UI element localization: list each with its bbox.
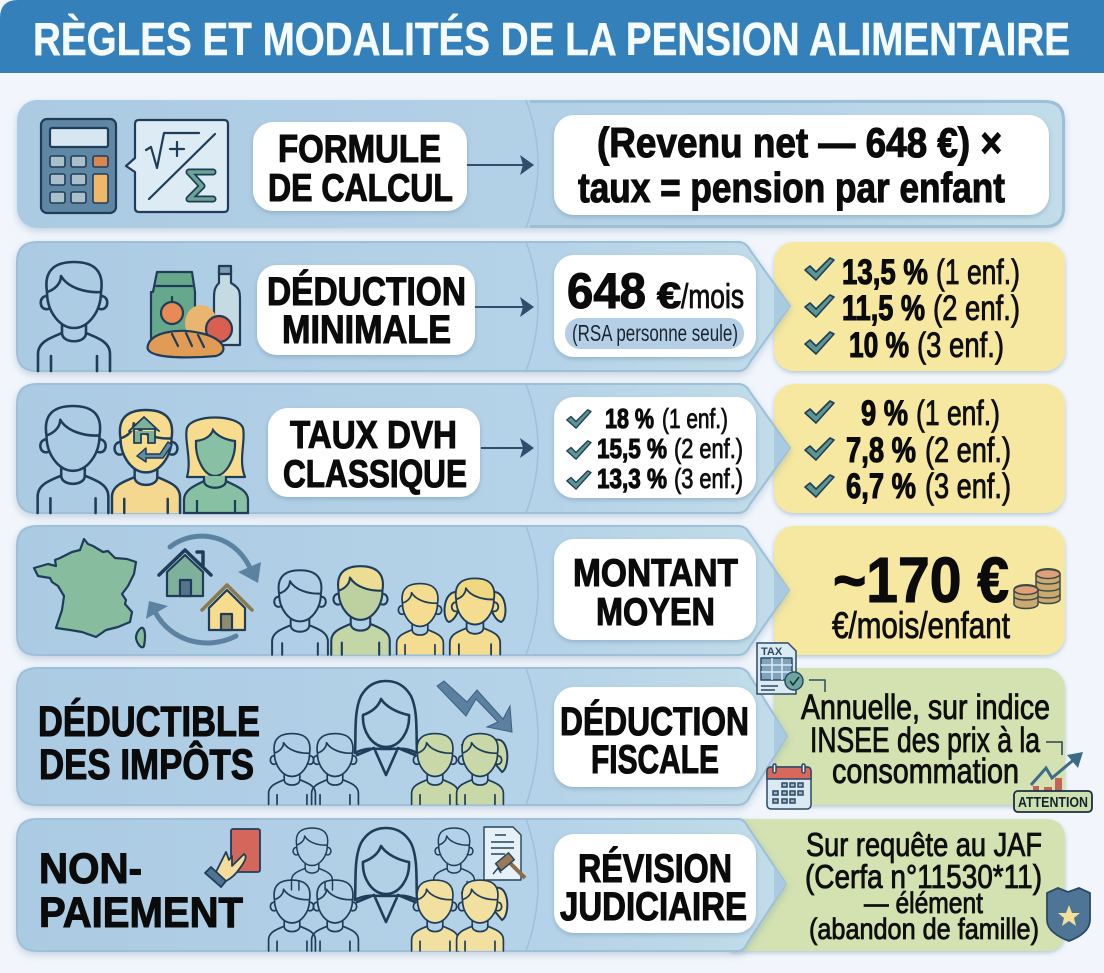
icon: calculator — [41, 119, 116, 213]
panel: taux DVH classique — [17, 384, 1065, 513]
yellow rates box: (1 enf.) — [916, 394, 1000, 433]
amount box: 648 €/mois — [554, 255, 756, 357]
yellow rates box: 7,8 % — [846, 431, 916, 470]
green revision box: Annuelle, sur indice — [801, 688, 1050, 727]
yellow amount box — [774, 526, 1065, 655]
panel: formule de calcul — [17, 100, 1065, 228]
heading: déductible des impôts: DES IMPÔTS — [39, 740, 254, 789]
label: montant moyen — [554, 539, 756, 640]
amount box: 648 €/mois: 648 — [567, 263, 646, 319]
label: révision judiciaire — [554, 834, 756, 933]
header banner — [0, 0, 1104, 73]
icon: three people with shared home — [38, 406, 248, 513]
green judicial box: — élément — [864, 887, 984, 920]
green revision box: consommation — [832, 752, 1019, 791]
label: déduction minimale: MINIMALE — [282, 308, 451, 352]
label: déduction fiscale: DÉDUCTION — [560, 699, 749, 744]
yellow rates box: 11,5 % — [842, 289, 925, 328]
green judicial box — [730, 819, 1065, 951]
icon: mother and four children — [269, 681, 507, 804]
label: déduction minimale: DÉDUCTION — [267, 269, 466, 314]
rates box — [554, 397, 756, 498]
label: déduction fiscale: FISCALE — [591, 738, 719, 782]
yellow rates box: 10 % — [849, 326, 909, 365]
rates box: 18 % — [605, 403, 654, 434]
yellow rates box: (1 enf.) — [936, 253, 1020, 292]
icon: tax document — [757, 643, 825, 694]
icon: rising chart with attention tag: ATTENTION — [1018, 794, 1088, 811]
icon: four children — [272, 566, 505, 655]
heading: non-paiement: PAIEMENT — [39, 889, 243, 937]
icon: groceries — [147, 266, 240, 357]
icon: hand holding red card — [205, 829, 260, 887]
formula box: taux = pension par enfant — [578, 164, 1005, 211]
label: taux DVH classique: CLASSIQUE — [283, 453, 467, 496]
heading: non-paiement — [39, 845, 243, 937]
rates box: 13,3 % — [597, 463, 667, 494]
icon: court document with gavel — [484, 827, 525, 880]
heading: déductible des impôts — [38, 698, 260, 789]
icon: map of France — [34, 539, 145, 647]
label: montant moyen: MOYEN — [596, 591, 715, 634]
rates box: (3 enf.) — [674, 463, 743, 494]
label: révision judiciaire: JUDICIAIRE — [560, 885, 747, 929]
rates box: (2 enf.) — [674, 433, 743, 464]
arrow — [467, 155, 534, 175]
yellow rates box — [774, 242, 1065, 371]
label: taux DVH classique: TAUX DVH — [290, 414, 457, 457]
heading: déductible des impôts: DÉDUCTIBLE — [38, 698, 260, 746]
formula box: (Revenu net — 648 €) × — [597, 119, 1002, 166]
yellow rates box: (2 enf.) — [933, 289, 1020, 328]
panel: déduction minimale — [17, 242, 1065, 371]
icon: downward trend arrow — [437, 681, 512, 732]
yellow rates box: (2 enf.) — [925, 431, 1011, 470]
yellow rates box: 9 % — [861, 394, 908, 433]
green judicial box: (abandon de famille) — [809, 913, 1039, 946]
icon: coins — [1014, 569, 1060, 608]
label: formule de calcul: DE CALCUL — [268, 167, 453, 210]
label: montant moyen: MONTANT — [573, 552, 738, 595]
formula box — [554, 115, 1049, 215]
icon: two houses with cycling arrows — [146, 536, 261, 643]
label: taux DVH classique — [268, 408, 480, 497]
yellow rates box: 6,7 % — [846, 467, 916, 506]
label: formule de calcul — [253, 122, 467, 211]
icon: tax document: TAX — [761, 646, 783, 658]
label: formule de calcul: FORMULE — [278, 128, 441, 171]
label: révision judiciaire: RÉVISION — [578, 846, 732, 891]
rates box: (1 enf.) — [662, 403, 728, 434]
panel: déductible des impôts — [17, 643, 1092, 812]
icon: mother with children — [269, 828, 507, 951]
green judicial box: Sur requête au JAF — [806, 826, 1042, 863]
amount box: 648 €/mois: (RSA personne seule) — [572, 320, 738, 346]
panel: montant moyen — [17, 526, 1065, 655]
yellow rates box: (3 enf.) — [917, 326, 1004, 365]
yellow rates box: 13,5 % — [842, 253, 928, 292]
rates box: 15,5 % — [597, 433, 667, 464]
amount box: 648 €/mois: /mois — [681, 278, 744, 316]
icon: police badge — [1047, 888, 1090, 941]
icon: rising chart with attention tag — [1014, 752, 1092, 812]
label: déduction fiscale — [554, 687, 756, 787]
label: déduction minimale — [257, 265, 475, 355]
icon: calendar — [767, 764, 811, 809]
panel: non-paiement — [17, 819, 1090, 951]
yellow rates box — [774, 384, 1065, 513]
green revision box — [774, 668, 1065, 805]
yellow amount box: €/mois/enfant — [832, 605, 1011, 646]
yellow rates box: (3 enf.) — [925, 467, 1011, 506]
amount box: 648 €/mois: € — [657, 275, 681, 316]
icon: person — [38, 262, 110, 371]
heading: non-paiement: NON- — [39, 845, 142, 893]
arrow — [475, 297, 534, 317]
yellow amount box: ~170 € — [833, 544, 1009, 616]
arrow — [481, 438, 534, 458]
icon: math formula bubble — [126, 120, 228, 212]
green judicial box: (Cerfa n°11530*11) — [805, 858, 1042, 895]
